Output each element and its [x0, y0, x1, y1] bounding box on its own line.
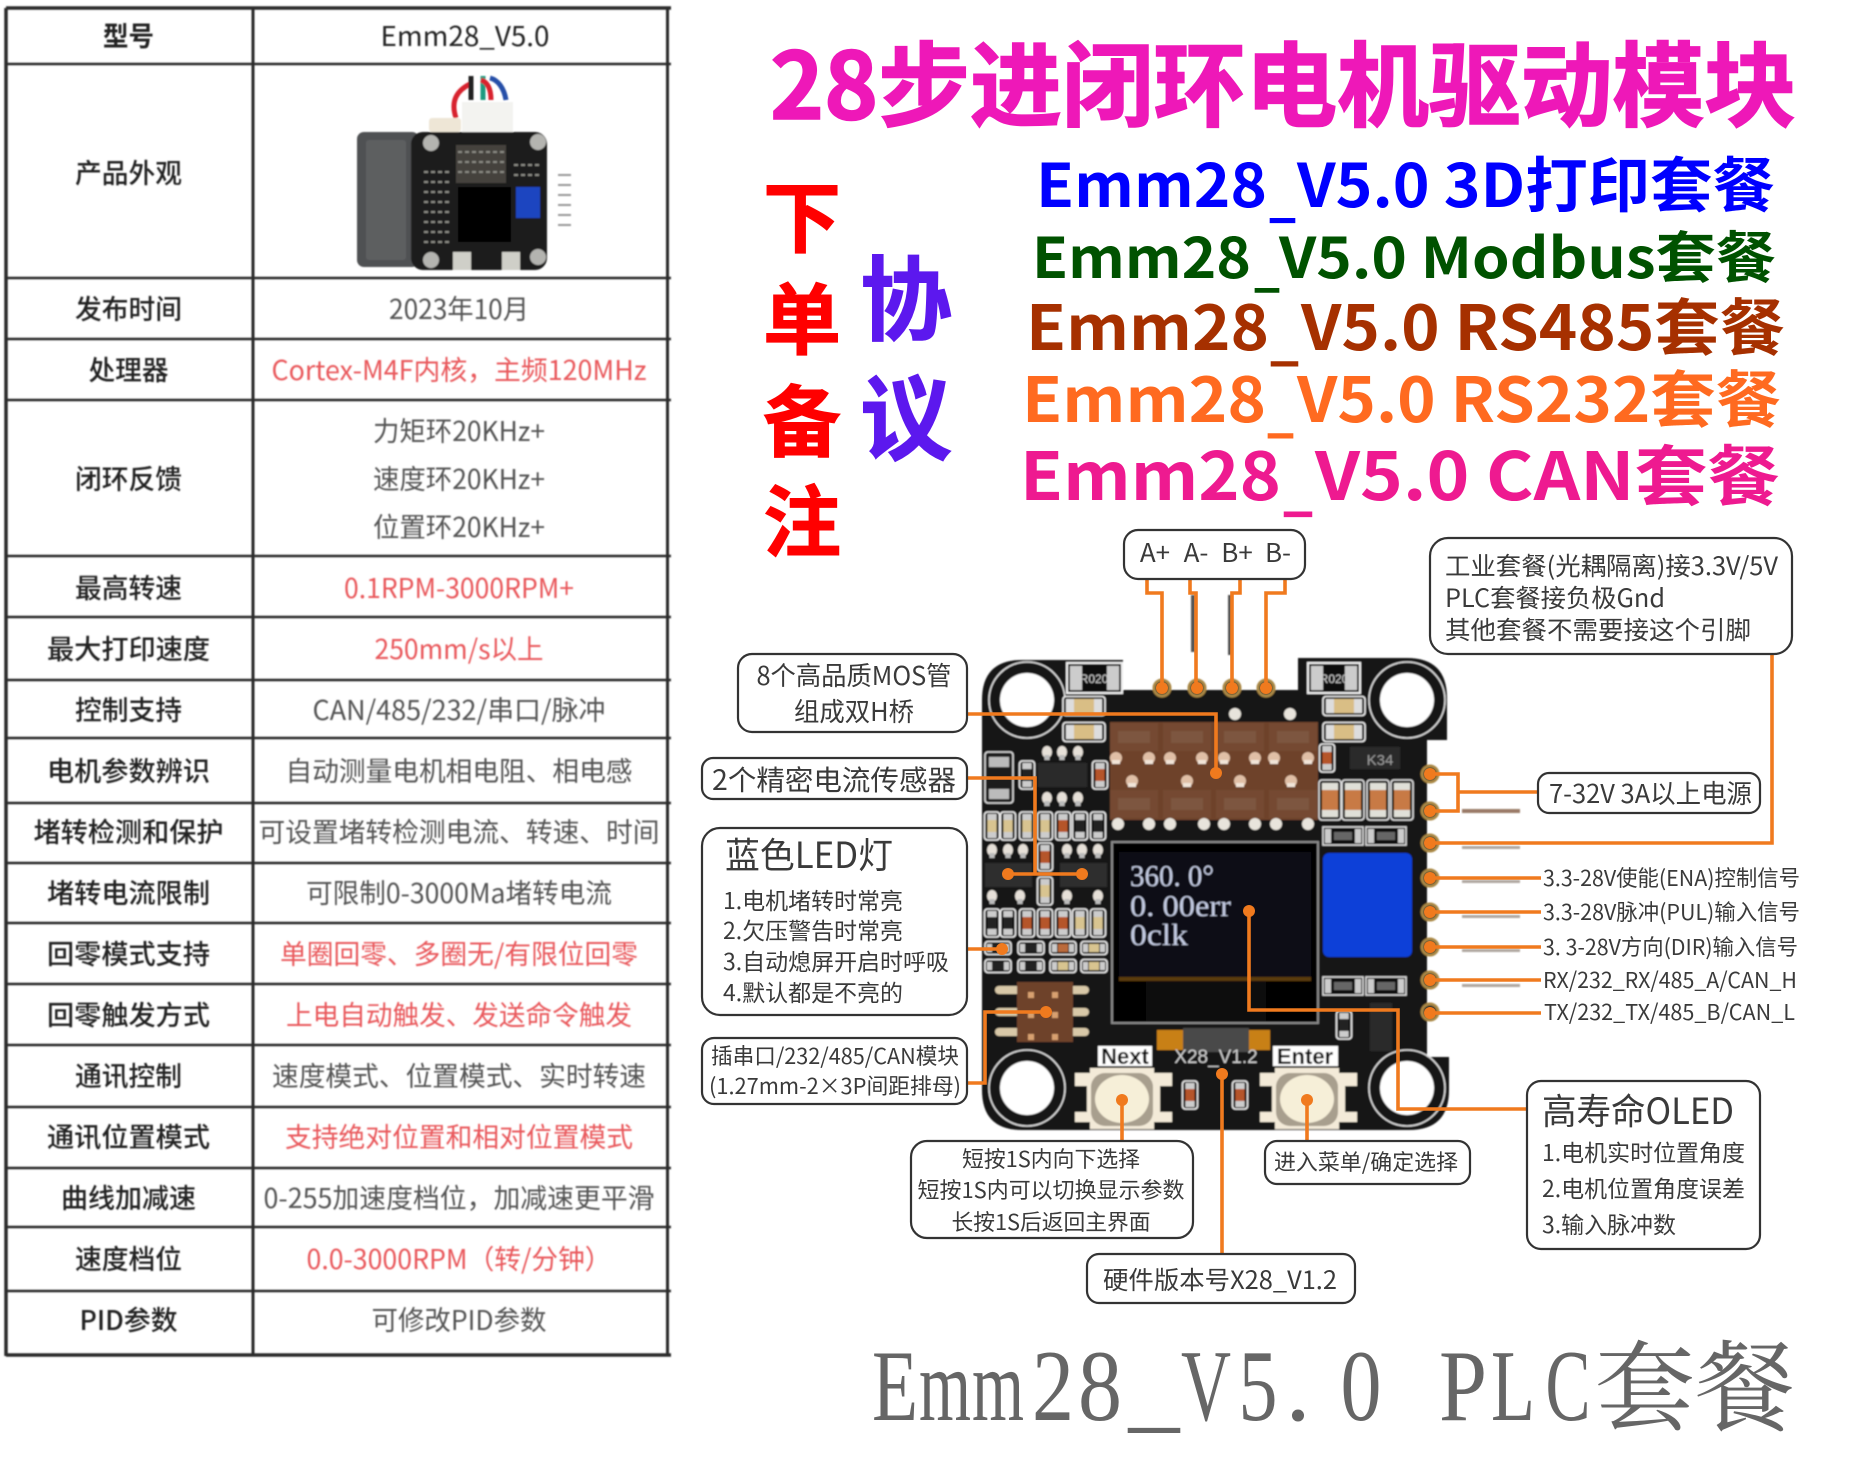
Next button: [1075, 1068, 1172, 1129]
callout: isolated input note: 工业套餐(光耦隔离)接3.3V/5V: [1445, 547, 1779, 583]
table right column values: 上电自动触发、发送命令触发: [286, 994, 632, 1033]
table right column values: 可设置堵转检测电流、转速、时间: [258, 811, 660, 850]
table right column values: 自动测量电机相电阻、相电感: [286, 750, 632, 789]
table right column values: 支持绝对位置和相对位置模式: [285, 1116, 633, 1155]
package: CAN: _: [1283, 431, 1313, 527]
callout: motor phases: A+: [1140, 533, 1170, 570]
table left column labels: 曲线加减速: [61, 1177, 196, 1216]
right side components: K34: [1367, 752, 1393, 769]
callout: MOSFET H bridge: [738, 654, 967, 732]
mounting holes: [989, 662, 1445, 1126]
blue potentiometer: [1323, 853, 1412, 957]
callout: Next button: 长按1S后返回主界面: [952, 1205, 1150, 1237]
package: Modbus: [1032, 214, 1776, 301]
current shunt resistors: [1067, 663, 1360, 693]
table left column labels: 堵转电流限制: [47, 872, 210, 911]
package: 3D printing: _: [1269, 145, 1296, 232]
callout: blue LED: 2.欠压警告时常亮: [723, 912, 903, 946]
package: 3D printing: [1036, 138, 1775, 232]
bottom heading: PLC package: E: [872, 1330, 918, 1443]
table right column values: 力矩环20KHz+: [373, 410, 545, 449]
signal pads: [1422, 766, 1438, 1020]
callout: current sensors: 2个精密电流传感器: [712, 759, 956, 799]
table grid: [6, 8, 671, 1356]
vertical label: protocol: 议: [860, 346, 952, 479]
table right column values: Cortex-M4F内核，主频120MHz: [272, 349, 647, 388]
callout: Enter button: 进入菜单/确定选择: [1274, 1145, 1458, 1177]
table right column values: 0.1RPM-3000RPM+: [344, 567, 574, 606]
table right column values: 位置环20KHz+: [373, 506, 545, 545]
pin labels: RX/232_RX/485_A/CAN_H: [1543, 963, 1797, 995]
table right column values: 可修改PID参数: [372, 1299, 546, 1338]
bottom resistors: [1182, 1081, 1248, 1109]
vertical label: order note: 注: [763, 461, 841, 573]
bottom heading: PLC package: L: [1491, 1330, 1535, 1443]
callout: serial socket: [702, 1038, 967, 1104]
bottom heading: PLC package: V: [1181, 1330, 1231, 1443]
OLED screen: 360. 0°: [1130, 858, 1214, 893]
motor phase pads: [1154, 680, 1274, 696]
callout: Enter button: [1265, 1141, 1470, 1184]
callout: blue LED: 蓝色LED灯: [725, 827, 893, 879]
vertical label: order note: 单: [763, 259, 841, 371]
title: 28步进闭环电机驱动模块: [770, 13, 1796, 146]
pin labels: 3.3-28V使能(ENA)控制信号: [1543, 861, 1800, 893]
package: CAN: Emm28: [1020, 424, 1281, 520]
motor wires: [454, 76, 506, 118]
bottom heading: PLC package: [872, 1310, 1795, 1451]
bottom heading: PLC package: P: [1439, 1330, 1487, 1443]
callout: isolated input note: PLC套餐接负极Gnd: [1445, 579, 1665, 615]
white connector: [429, 118, 461, 132]
callout: blue LED: 4.默认都是不亮的: [723, 974, 903, 1008]
MOSFET block: [1110, 708, 1318, 830]
table right column values: 速度模式、位置模式、实时转速: [272, 1055, 646, 1094]
current shunt resistors: R020: [1320, 672, 1349, 686]
callout: OLED: 3.输入脉冲数: [1542, 1206, 1676, 1240]
callout: motor phases: B-: [1265, 533, 1291, 570]
vertical label: protocol: [860, 227, 952, 479]
package: RS232: [1022, 350, 1781, 447]
callout: OLED: 高寿命OLED: [1542, 1083, 1734, 1135]
table left column labels: 最高转速: [75, 567, 182, 606]
version silkscreen: X28_V1.2: [1174, 1047, 1258, 1068]
OLED screen: 0. 00err: [1130, 888, 1232, 923]
table right column values: 可限制0-3000Ma堵转电流: [306, 872, 612, 911]
right side components: [1319, 744, 1413, 1051]
package: RS232: Emm28: [1022, 350, 1266, 440]
callout: MOSFET H bridge: 8个高品质MOS管: [756, 656, 952, 693]
table left column labels: 通讯控制: [75, 1055, 182, 1094]
motor body: [357, 132, 419, 267]
callout: power supply: 7-32V 3A以上电源: [1549, 774, 1752, 811]
table left column labels: 闭环反馈: [75, 458, 182, 497]
six pin socket: [995, 982, 1089, 1042]
package: 3D printing: V5.0 3D打印套餐: [1296, 138, 1775, 225]
pin labels: TX/232_TX/485_B/CAN_L: [1544, 995, 1795, 1027]
table left column labels: 回零触发方式: [47, 994, 210, 1033]
bottom heading: PLC package: 8: [1078, 1330, 1122, 1443]
table left column labels: 产品外观: [75, 152, 182, 191]
product photo: stepper motor with driver board: [357, 76, 571, 270]
callout: motor phases: [1124, 530, 1305, 579]
callout: blue LED: [702, 827, 967, 1015]
vertical label: order note: 备: [763, 361, 841, 473]
table left column labels: 堵转检测和保护: [34, 811, 224, 850]
table right column values: 250mm/s以上: [374, 628, 544, 667]
table right column values: 2023年10月: [389, 288, 529, 327]
board outline: [982, 658, 1449, 1130]
table left column labels: 发布时间: [75, 288, 182, 327]
package list: [1020, 138, 1785, 527]
pin labels: [1543, 861, 1800, 1027]
bottom heading: PLC package: 0: [1340, 1330, 1382, 1443]
table right column values: [258, 15, 660, 1338]
table left column labels: 处理器: [88, 349, 168, 388]
bottom heading: PLC package: 套餐: [1595, 1310, 1795, 1451]
package: Modbus: _: [1254, 220, 1280, 301]
table right column values: 0.0-3000RPM（转/分钟）: [306, 1238, 612, 1277]
faint pin headers: [558, 174, 571, 226]
table left column labels: 速度档位: [75, 1238, 182, 1277]
callout: Next button: [911, 1141, 1193, 1238]
package: CAN: [1020, 424, 1780, 527]
package: RS232: V5.0 RS232套餐: [1296, 350, 1781, 440]
left side component field: [984, 746, 1108, 972]
table left column labels: 通讯位置模式: [47, 1116, 210, 1155]
screws and buttons: [423, 134, 546, 268]
table left column labels: 电机参数辨识: [47, 750, 210, 789]
vertical label: protocol: 协: [860, 227, 952, 360]
small capacitors top: [1063, 696, 1365, 742]
pin labels: 3. 3-28V方向(DIR)输入信号: [1543, 930, 1798, 962]
table left column labels: 回零模式支持: [47, 933, 210, 972]
table left column labels: [34, 15, 224, 1338]
table right column values: 单圈回零、多圈无/有限位回零: [280, 933, 638, 972]
callout: serial socket: (1.27mm-2×3P间距排母): [709, 1069, 961, 1101]
Enter label: Enter: [1277, 1044, 1334, 1069]
bottom heading: PLC package: C: [1546, 1330, 1590, 1443]
package: RS485: Emm28: [1026, 278, 1269, 368]
bottom heading: PLC package: m: [919, 1330, 971, 1443]
callout: hardware version: [1087, 1254, 1355, 1303]
package: 3D printing: Emm28: [1036, 138, 1267, 225]
package: RS232: _: [1267, 357, 1294, 447]
callout: MOSFET H bridge: 组成双H桥: [794, 692, 914, 729]
table left column labels: 型号: [103, 15, 154, 54]
package: Modbus: V5.0 Modbus套餐: [1278, 214, 1776, 295]
package: RS485: [1026, 278, 1785, 375]
bottom heading: PLC package: 2: [1032, 1330, 1074, 1443]
callout: blue LED: 3.自动熄屏开启时呼吸: [723, 943, 949, 977]
bottom heading: PLC package: _: [1128, 1330, 1180, 1443]
callout: hardware version: 硬件版本号X28_V1.2: [1103, 1261, 1337, 1297]
callout: OLED: 2.电机位置角度误差: [1542, 1170, 1745, 1204]
header pins above and beside the board: [1191, 595, 1520, 987]
callout: Next button: 短按1S内向下选择: [962, 1142, 1140, 1174]
callout: motor phases: A-: [1184, 533, 1208, 570]
driver board: [411, 132, 547, 270]
current shunt resistors: R020: [1080, 672, 1109, 686]
board screen and blue part: [458, 187, 511, 242]
callout: Next button: 短按1S内可以切换显示参数: [918, 1173, 1184, 1205]
callout: OLED: [1527, 1081, 1760, 1249]
package: Modbus: Emm28: [1032, 214, 1251, 295]
vertical label: order note: 下: [763, 157, 841, 269]
vertical label: order note: [763, 157, 841, 573]
table left column labels: PID参数: [80, 1299, 178, 1338]
bottom heading: PLC package: .: [1285, 1330, 1311, 1443]
callout: OLED: 1.电机实时位置角度: [1542, 1134, 1745, 1168]
ribbon flex: [1157, 1028, 1270, 1052]
pin labels: 3.3-28V脉冲(PUL)输入信号: [1543, 895, 1800, 927]
OLED screen: 0clk: [1130, 917, 1189, 952]
package: RS485: _: [1270, 285, 1299, 375]
table right column values: 0-255加速度档位，加减速更平滑: [264, 1177, 654, 1216]
package: RS485: V5.0 RS485套餐: [1300, 278, 1785, 368]
package: CAN: V5.0 CAN套餐: [1314, 424, 1780, 520]
table right column values: CAN/485/232/串口/脉冲: [312, 689, 606, 728]
panel: specification table: [6, 8, 671, 1356]
Enter button: [1260, 1068, 1357, 1129]
bottom heading: PLC package: m: [972, 1330, 1024, 1443]
callout: blue LED: 1.电机堵转时常亮: [723, 882, 903, 916]
table left column labels: 最大打印速度: [47, 628, 210, 667]
table right column values: Emm28_V5.0: [380, 15, 550, 54]
circuit board: [982, 658, 1449, 1130]
table right column values: 速度环20KHz+: [373, 458, 545, 497]
Next label: Next: [1101, 1044, 1150, 1069]
table left column labels: 控制支持: [75, 689, 182, 728]
callout: serial socket: 插串口/232/485/CAN模块: [711, 1039, 959, 1071]
OLED screen: [1112, 842, 1318, 1023]
orange leader lines: [967, 579, 1772, 1254]
bottom heading: PLC package: 5: [1238, 1330, 1278, 1443]
callout: isolated input note: [1430, 538, 1792, 654]
callout: motor phases: B+: [1221, 533, 1253, 570]
callout: isolated input note: 其他套餐不需要接这个引脚: [1445, 611, 1751, 647]
